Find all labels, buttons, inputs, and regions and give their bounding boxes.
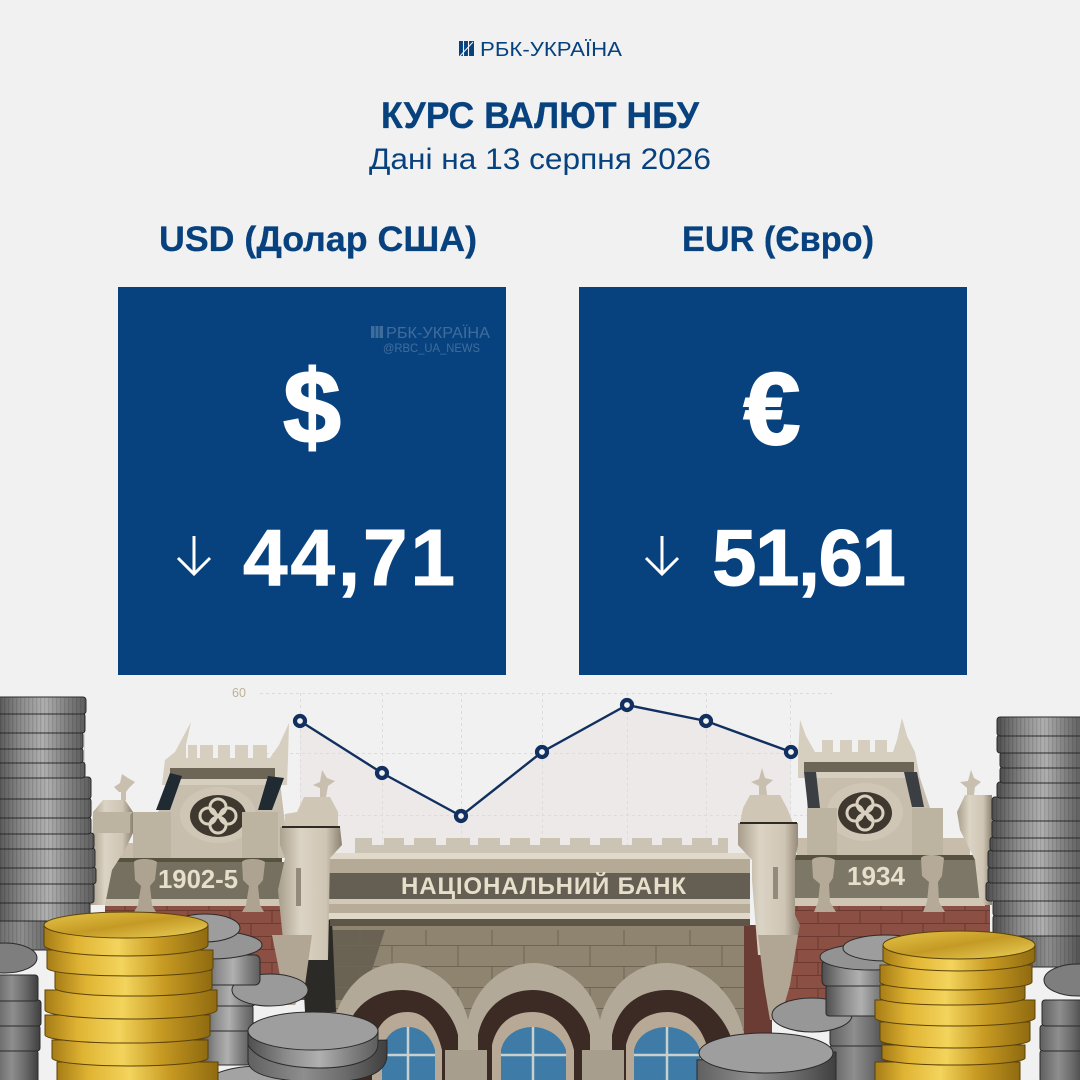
logo: РБК-Україна: РБК-УКРАЇНА xyxy=(480,39,623,61)
title: КУРС ВАЛЮТ НБУ xyxy=(381,95,700,136)
coin edge ribbing: far right stack xyxy=(987,718,1080,966)
date plaque: 1902-5 xyxy=(158,864,238,894)
right gable with rose window xyxy=(798,718,943,855)
silver coins: behind left gold stack xyxy=(158,914,308,1065)
lion corbels xyxy=(812,857,836,912)
upper cornice xyxy=(320,853,750,926)
USD rate value: 44,71 xyxy=(243,513,455,602)
left turret xyxy=(272,770,342,1005)
red brick sections xyxy=(105,905,990,1020)
icon: euro sign: € xyxy=(744,352,800,466)
battlements xyxy=(355,838,728,855)
coin edge ribbing: far left stack xyxy=(0,698,95,949)
axis label: 60 xyxy=(232,686,246,700)
arches xyxy=(332,963,745,1080)
left gable with rose window xyxy=(133,722,289,858)
silver coins: lying, centre-left xyxy=(202,1012,387,1080)
gold coin stack: right xyxy=(875,931,1035,1080)
subtitle: date: Дані на 13 серпня 2026 xyxy=(369,143,711,176)
main wall xyxy=(300,918,772,1080)
chart backdrop xyxy=(232,686,832,860)
heading: USD: USD (Долар США) xyxy=(159,220,477,259)
far-left turret xyxy=(90,800,133,905)
panel: EUR xyxy=(579,287,967,675)
gold coin stack: left xyxy=(44,912,218,1080)
silver coins: behind right gold stack xyxy=(772,935,927,1080)
icon: down arrow xyxy=(178,536,210,574)
panel: USD xyxy=(118,287,506,675)
left wing xyxy=(90,774,287,912)
heading: EUR: EUR (Євро) xyxy=(682,220,874,259)
right wing xyxy=(795,770,992,912)
silver coins: lying, centre-right xyxy=(697,1033,836,1080)
icon: down arrow xyxy=(646,536,678,574)
icon: dollar sign: $ xyxy=(283,350,341,466)
silver coins: lower far left xyxy=(0,943,41,1080)
lion corbels xyxy=(134,859,157,912)
building: National Bank of Ukraine xyxy=(90,718,992,1080)
silver coin stack: far right xyxy=(986,717,1080,967)
silver coin stack: far left xyxy=(0,697,96,950)
watermark: @RBC_UA_NEWS xyxy=(383,341,480,355)
silver coins: lower far right xyxy=(1040,964,1080,1080)
right turret xyxy=(738,768,800,1020)
watermark: РБК-УКРАЇНА xyxy=(386,325,491,342)
EUR rate value: 51,61 xyxy=(712,513,906,602)
date plaque: 1934 xyxy=(847,861,906,891)
watermark xyxy=(371,325,491,355)
far-right turret xyxy=(957,795,992,905)
chart line with markers xyxy=(295,700,796,821)
inscription: НАЦІОНАЛЬНИЙ БАНК xyxy=(401,872,686,900)
